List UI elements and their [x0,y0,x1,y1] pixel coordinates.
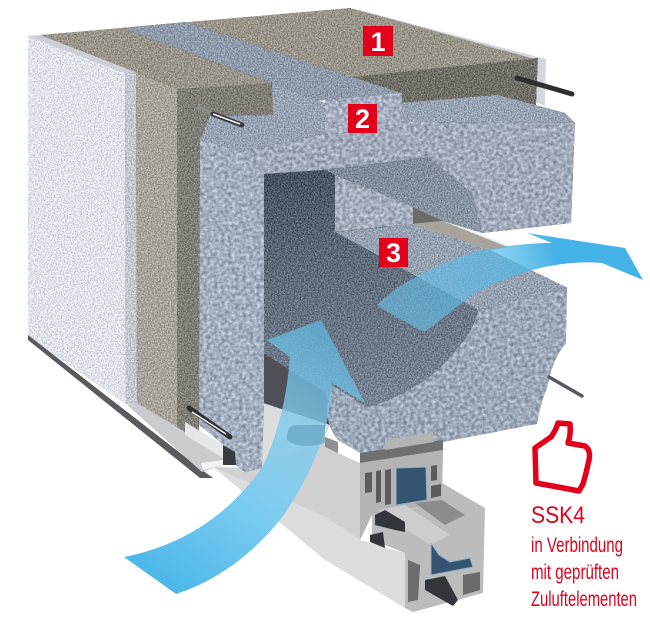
label 1: 1 [370,27,386,57]
label 2 [348,104,377,134]
concrete inner face left [177,83,273,440]
frame inner chambers [365,465,441,505]
caption: details: mit geprüften [531,561,619,584]
raised block front [325,93,402,135]
sill reveal [262,403,330,468]
anchor rod: lower left [189,408,230,437]
arrow: airflow inward [124,320,365,594]
icon: thumbs up [535,423,590,491]
window side face [213,437,360,540]
plaster strip on far right [352,8,546,106]
hook notch in arrow [287,425,325,446]
window lower side face [213,467,405,608]
window frame section [360,432,485,612]
label 3 [379,238,408,268]
insulation lower top face [335,224,568,310]
white edge [443,220,510,247]
concrete sliver [413,207,443,224]
lintel arched underside [325,157,482,233]
anchor rod: upper left [197,107,242,125]
sash cross-section [372,483,485,612]
insulation raised block side [272,83,325,133]
small bracket [325,437,338,453]
anchor rod: upper right [517,78,572,94]
aluminium plaster profile [127,403,236,472]
anchor rod: lower right [549,377,582,396]
frame upper cross-section [360,450,443,540]
steel reinforcement upper [396,467,427,505]
caption: SSK4: SSK4 [531,502,585,529]
concrete layer: top surface [40,8,538,89]
sealing band [360,440,443,463]
insulation strip on top [122,22,402,106]
gasket [375,510,405,532]
arrow: airflow outward [377,233,643,332]
interior reveal [263,168,490,425]
plaster base line [28,335,213,478]
caption: details [531,534,637,611]
inner insulation block [335,175,413,232]
insulation left column [199,140,264,472]
sash upper surface [378,505,450,545]
interior lower shadow [263,353,335,425]
label 1 [363,26,393,57]
insulation lower front [327,288,567,453]
insulation lintel front [240,110,575,233]
steel reinforcement lower [431,543,473,575]
concrete section left [136,72,177,432]
lower chambers [425,576,458,606]
cover plate [385,432,434,450]
concrete inner face right [340,58,538,106]
plaster outer wall face [28,36,137,404]
insulation top right [401,95,575,123]
label 2: 2 [355,104,370,134]
label 3: 3 [386,238,401,268]
insulation top face [200,115,325,152]
insulation backing [325,93,575,233]
plaster top edge [28,35,135,73]
